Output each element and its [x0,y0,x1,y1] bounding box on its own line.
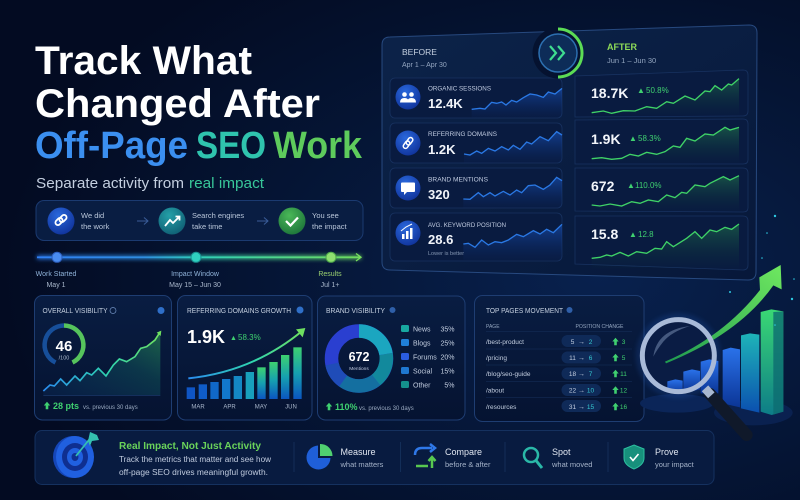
icon: link [48,208,74,234]
panel: top pages movement: TOP PAGES MOVEMENT [486,308,564,315]
stat: 1.9K: 58.3% [238,333,261,342]
timeline: Impact Window [171,271,220,278]
panel: bottom summary strip [35,430,714,484]
text: real impact: off-page SEO drives meaningful growth. [119,468,268,477]
text: prove: your impact [655,460,695,469]
table rows: 2 [589,339,593,346]
legend: Forums [413,354,437,362]
panel: process flow [36,200,363,240]
legend: Social [413,368,433,376]
legend: News [413,326,431,334]
lens glow and glass [636,313,721,398]
text: you see the impact: the impact [312,222,348,231]
text: real impact [119,441,271,477]
green growth arrow [665,265,782,363]
timeline: May 15 – Jun 30 [169,282,221,289]
table header [486,324,624,330]
after metrics: ▲ [629,134,637,143]
table rows: 10 [587,388,594,394]
after heading [607,42,656,65]
before heading [402,47,447,69]
stat: 28 pts [44,401,138,411]
decorative particles [729,215,795,326]
title: Changed After [35,82,320,126]
table rows: 5 [622,355,626,362]
stat: 1.9K: ▲ [230,335,237,342]
icon: target with dart [53,432,99,478]
before metrics: ORGANIC SESSIONS [428,86,492,92]
trend line chart [43,331,161,396]
table rows: → [578,388,585,394]
table rows: 7 [589,371,593,378]
text: measure: what matters [340,460,384,469]
panel: top pages movement [474,296,644,422]
after metrics: 12.8 [638,230,654,239]
icon: before-to-after toggle [532,28,584,78]
after metrics: 1.9K [591,131,621,147]
timeline [36,252,361,289]
table rows: /best-product [486,339,524,346]
icon: trend [158,208,186,234]
gauge [45,326,83,362]
text: compare [445,447,491,469]
text: real impact: Real Impact, Not Just Activity [119,441,261,452]
text: search engines take time: take time [192,222,222,231]
timeline: Work Started [36,271,76,278]
text: spot [551,447,592,469]
illustration: magnifier over rising bars [636,265,793,435]
text: prove [655,447,695,469]
text: you see the impact: You see [312,211,339,220]
table rows: → [578,355,585,362]
donut chart: Mentions [349,366,369,372]
sparklines before [463,88,562,260]
panel: brand visibility [318,296,465,420]
title: Work [273,125,363,167]
table rows: /resources [486,404,517,411]
table header: PAGE [486,324,500,330]
title [35,39,363,167]
gauge: 46 [56,338,72,355]
axis labels: MAY [255,404,267,410]
table rows: 16 [620,404,627,411]
before metrics: 28.6 [428,232,453,247]
table rows: 6 [589,355,593,362]
panel: referring domains growth [178,296,312,420]
panel: before and after comparison [382,25,757,280]
before metrics: BRAND MENTIONS [428,176,489,184]
icon: shield [624,445,644,469]
icon: search [524,448,542,468]
table rows: 5 [571,339,575,346]
stat: 1.9K: 1.9K [187,327,225,347]
panel: referring domains growth: REFERRING DOMAINS GROWTH [187,308,291,315]
table rows: 12 [620,388,627,394]
table rows: → [578,339,585,346]
after metrics: ▲ [637,86,645,95]
legend: Other [413,382,431,390]
icon: brand mentions [396,176,420,200]
row backgrounds [390,70,748,270]
icon: compare arrows [415,444,436,468]
after metrics: ▲ [627,181,635,190]
after metrics: 18.7K [591,85,628,101]
table rows [486,335,627,412]
table rows: 15 [587,404,594,411]
legend: 35% [440,326,454,334]
timeline: May 1 [46,282,66,289]
donut chart: 672 [349,350,369,364]
stat: 1.9K [187,327,261,347]
table rows: 31 [569,404,576,411]
text: measure [340,447,384,469]
3D bars [667,309,783,415]
text: prove: Prove [655,447,679,457]
title: Track What [35,39,252,83]
before metrics: 1.2K [428,142,456,157]
table rows: 22 [569,388,576,394]
axis labels: APR [223,404,236,410]
table rows: 11 [620,371,627,378]
before metrics: REFERRING DOMAINS [428,131,498,138]
info icon [296,306,304,314]
sparklines after [592,79,739,268]
after heading: AFTER [607,42,637,52]
icon: check [278,208,306,234]
platforms [640,394,793,425]
after metrics: 50.8% [646,86,669,95]
table rows: /pricing [486,355,507,362]
after metrics: 58.3% [638,134,661,143]
before heading: Apr 1 – Apr 30 [402,62,447,69]
legend: 20% [440,354,454,362]
before metrics: 320 [428,187,450,202]
icon: organic sessions [396,84,420,110]
text: we did the work: the work [81,222,110,231]
legend: Blogs [413,340,431,348]
axis labels: JUN [285,404,297,410]
before heading: BEFORE [402,47,437,57]
stat: 28 pts: vs. previous 30 days [83,405,138,411]
after metrics: 672 [591,178,615,194]
panel: brand visibility: BRAND VISIBILITY [326,308,385,315]
stat: 110%: 110% [335,402,358,412]
bar chart [187,328,305,399]
text: measure: Measure [340,447,376,457]
arrow [257,218,268,224]
legend: 5% [444,382,454,390]
subtitle [36,175,265,192]
magnifying glass ring and handle [642,320,747,435]
table rows: /about [486,388,504,394]
table rows: /blog/seo-guide [486,371,531,378]
after heading: Jun 1 – Jun 30 [607,56,656,65]
table rows: 3 [622,339,626,346]
panel: overall visibility [34,296,172,420]
arrow [137,218,148,224]
stat: 110% [326,402,414,412]
after metrics [591,85,669,242]
table rows: → [578,371,585,378]
icon: keyword position [396,220,420,246]
info icons [110,307,164,314]
stat: 28 pts: 28 pts [53,401,79,411]
legend [401,325,454,390]
timeline: Results [318,271,342,278]
panel: overall visibility: OVERALL VISIBILITY [42,308,108,315]
icon: pie chart [307,444,332,469]
before metrics: AVG. KEYWORD POSITION [428,222,506,229]
after metrics: 110.0% [635,181,662,190]
table rows: → [578,404,585,411]
table header: POSITION CHANGE [576,324,624,330]
gauge: /100 [59,356,69,362]
after metrics: ▲ [629,230,637,239]
text: spot: Spot [552,447,571,457]
before metrics: Lower is better [428,251,464,257]
after metrics: 15.8 [591,226,618,242]
before metrics [428,86,506,257]
before metrics: 12.4K [428,96,463,111]
subtitle: Separate activity from [36,175,184,192]
donut chart [332,331,386,386]
info icon [566,307,572,313]
text: we did the work: We did [81,211,104,220]
table rows: 18 [569,371,576,378]
timeline: Jul 1+ [321,282,339,289]
text: search engines take time: Search engines [192,211,244,220]
text: spot: what moved [551,460,592,469]
info icon [390,307,396,313]
title: Off-Page [35,125,188,167]
subtitle: real impact [189,175,265,192]
stat: 110%: vs. previous 30 days [359,406,414,412]
axis labels: MAR [191,404,205,410]
table rows: 11 [569,355,576,362]
text: real impact: Track the metrics that matter and see how [119,455,271,464]
icon: referring domains [396,130,420,156]
title: SEO [196,125,266,167]
legend: 25% [440,340,454,348]
text: compare: before & after [445,460,491,469]
axis labels [191,404,297,410]
text: compare: Compare [445,447,482,457]
legend: 15% [440,368,454,376]
